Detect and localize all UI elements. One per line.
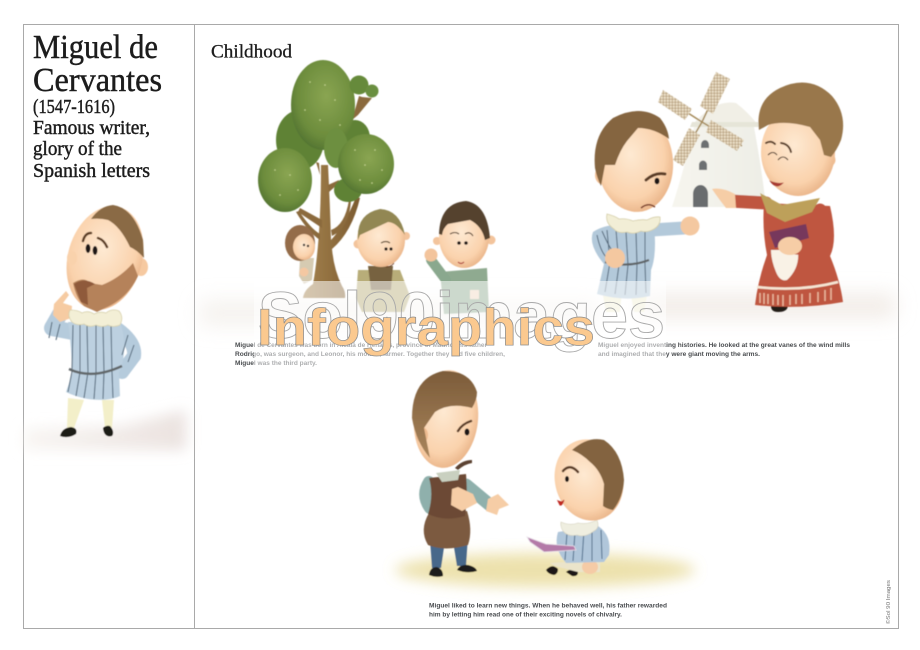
father: head <box>409 367 483 471</box>
son: foot <box>582 560 598 574</box>
father: shoes <box>429 565 477 577</box>
Mother: outstretched arm <box>730 201 766 203</box>
boy two <box>424 201 496 314</box>
subtitle: Famous writer, <box>33 117 150 139</box>
watermark <box>257 278 665 357</box>
Mother: closed eyes, brows, mouth <box>766 142 791 186</box>
father: hand <box>451 487 477 511</box>
caption: father rewarded him: Miguel liked to learn new things. When he behaved well, his father rewarded <box>429 602 667 610</box>
title: name: Miguel de <box>33 29 158 66</box>
Miguel: face <box>641 174 665 208</box>
tiled floor <box>395 553 695 587</box>
subtitle: glory of the <box>33 138 122 160</box>
father: sleeves <box>425 482 430 508</box>
Mother: holding hand <box>778 237 802 255</box>
son: face <box>558 467 578 505</box>
caption: inventing histories: and imagined that they were giant moving the arms. <box>598 351 760 358</box>
son: stripes <box>565 529 602 561</box>
Mother: pointing hand <box>712 189 736 208</box>
Miguel: stripes <box>597 230 646 295</box>
floor shadow <box>24 410 186 450</box>
floor band: second scene <box>640 294 895 318</box>
caption: Miguel's birth: Rodrigo, was surgeon, and Leonor, his mother, farmer. Together they had five children, <box>235 351 505 358</box>
son: doublet <box>557 526 610 563</box>
scene: windmill, Miguel and mother <box>592 72 843 312</box>
Mother: hair <box>758 83 843 157</box>
sidebar divider <box>194 24 196 628</box>
son: shoes <box>546 566 578 576</box>
caption band scrim <box>235 342 851 367</box>
caption: inventing histories: Miguel enjoyed inventing histories. He looked at the great vanes of the wind mills <box>598 342 851 349</box>
father: pointing hand <box>486 494 509 515</box>
Mother: apron <box>771 250 798 280</box>
Miguel: head <box>593 109 677 215</box>
windmill <box>658 72 766 207</box>
Miguel: legs <box>602 290 648 312</box>
Mother: other arm <box>795 210 826 249</box>
beard <box>73 263 138 312</box>
eyebrows <box>83 233 107 247</box>
moustache and goatee <box>74 280 95 305</box>
girl behind tree <box>285 225 315 284</box>
dates: (1547-1616) <box>33 96 115 118</box>
father: vest <box>428 474 467 519</box>
Miguel: hand <box>605 248 625 268</box>
caption: father rewarded him: him by letting him read one of their exciting novels of chivalry. <box>429 612 622 618</box>
belt <box>69 366 122 374</box>
heading: Childhood: Childhood <box>211 42 293 62</box>
shoes <box>60 426 113 437</box>
son: ruff collar <box>561 520 598 536</box>
sleeve arm left <box>52 314 78 333</box>
illustration: adult Cervantes <box>24 197 186 450</box>
Mother: ear <box>822 154 836 166</box>
sleeve arm right <box>116 328 134 372</box>
Mother: shoes <box>771 299 815 312</box>
father: ear <box>416 427 428 443</box>
head <box>55 197 155 319</box>
son: legs <box>550 560 600 572</box>
father: legs <box>430 535 468 568</box>
Miguel: doublet <box>592 224 655 299</box>
ruff collar <box>69 310 122 326</box>
father: face <box>455 421 472 470</box>
Miguel: belt <box>605 260 649 265</box>
nose <box>67 251 77 265</box>
watermark scrim <box>254 281 666 369</box>
watermark: orange wordmark: Infographics <box>257 299 595 357</box>
Miguel: fist <box>680 216 700 236</box>
title block <box>33 29 162 182</box>
doublet stripes <box>49 322 134 399</box>
caption: Miguel's birth: Miguel de Cervantes was born in Alcalá de Henares, province of Madrid. His father <box>235 342 488 349</box>
subtitle <box>33 117 150 182</box>
foliage <box>258 60 394 212</box>
eyes <box>86 244 97 255</box>
subtitle: Spanish letters <box>33 160 150 182</box>
legs <box>67 398 114 428</box>
Mother: dress <box>755 203 843 307</box>
son: ear <box>606 483 620 499</box>
caption: Miguel's birth: Miguel was the third party. <box>235 360 317 367</box>
Miguel: ruff collar <box>607 214 660 233</box>
hair <box>91 205 144 258</box>
book <box>527 537 576 552</box>
scene: children under the tree <box>258 60 496 314</box>
watermark: outlined wordmark: Sol90images <box>258 278 665 352</box>
father: hair <box>412 371 477 458</box>
son: head <box>546 432 632 528</box>
Mother: hem pattern <box>760 288 831 306</box>
Mother: collar <box>760 193 820 222</box>
tree trunk and branches <box>296 96 372 298</box>
son: hair <box>572 439 624 510</box>
doublet <box>66 322 124 400</box>
father: breeches <box>424 511 470 548</box>
hand <box>53 291 72 322</box>
copyright note: ©Sol 90 Images <box>885 580 892 624</box>
ear <box>134 258 148 276</box>
Miguel: ear <box>595 166 609 184</box>
title: name: Cervantes <box>33 62 162 99</box>
scene: father and son with the book <box>395 367 695 587</box>
father: shirt collar <box>436 470 460 482</box>
floor band: first scene <box>200 300 600 326</box>
windmill sails <box>658 72 744 166</box>
Mother: hem band <box>757 282 838 289</box>
Miguel: hair <box>595 111 669 186</box>
foliage speckles <box>274 81 383 196</box>
Mother: face <box>761 108 835 196</box>
boy one <box>354 209 410 312</box>
Miguel: arm <box>652 228 684 230</box>
title: name <box>33 29 162 99</box>
Mother: book <box>769 224 809 248</box>
